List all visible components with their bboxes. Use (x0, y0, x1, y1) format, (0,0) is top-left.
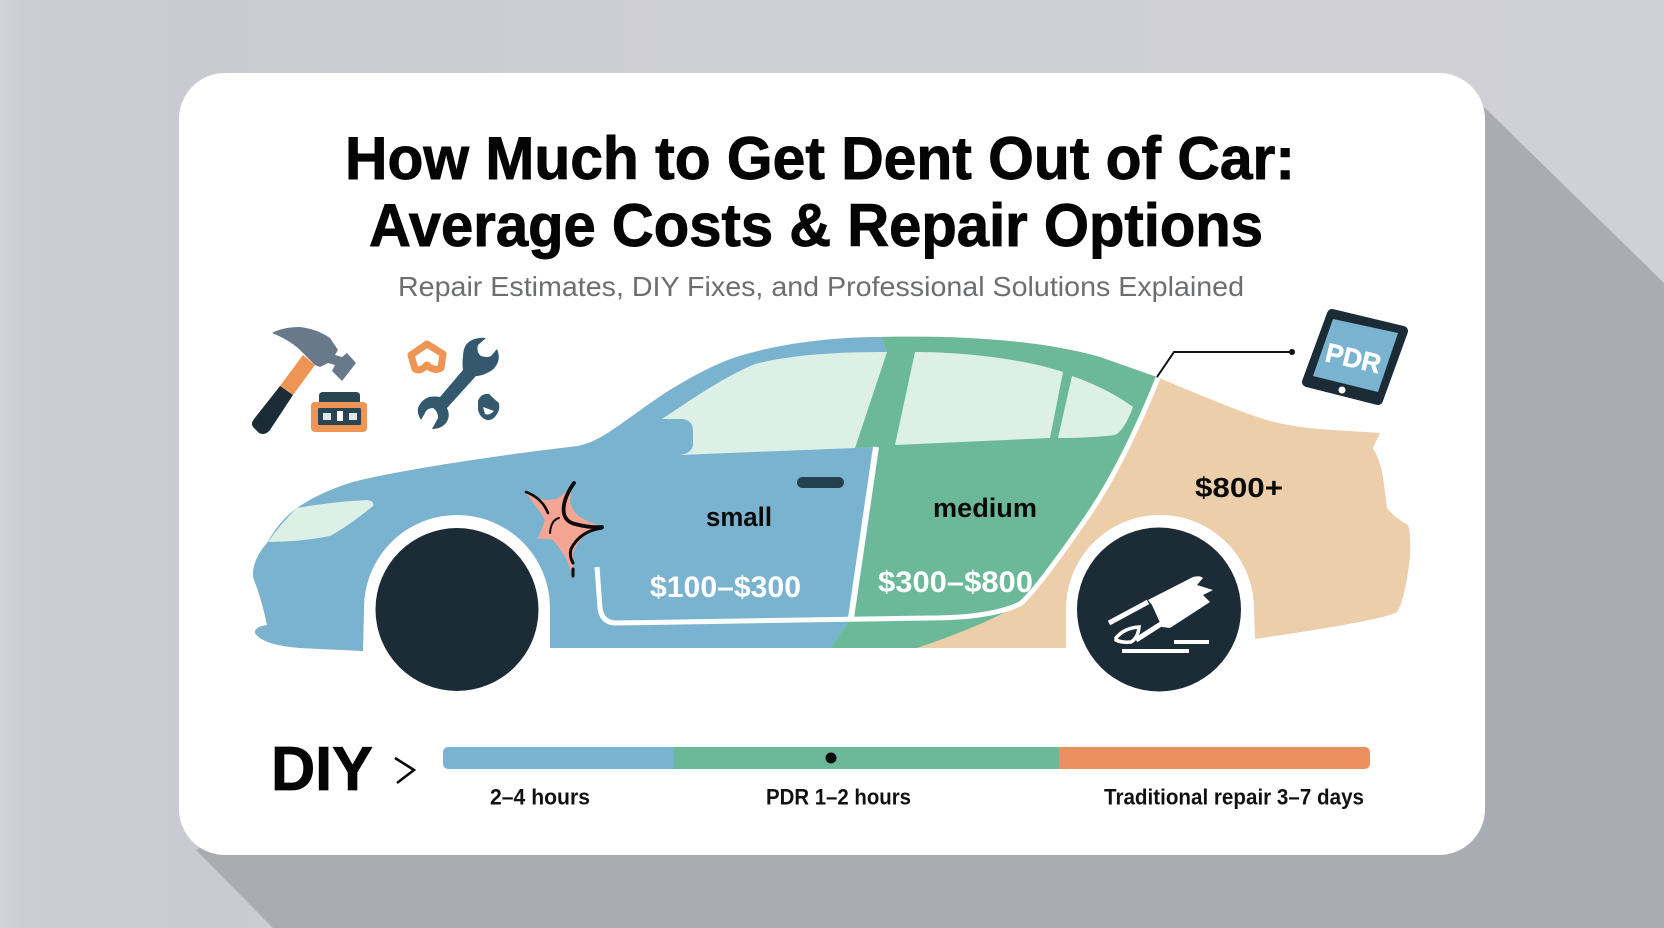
time label: traditional: Traditional repair 3–7 days (1104, 784, 1364, 810)
repair time bar (443, 747, 1370, 769)
small dent label: small (706, 502, 772, 532)
icon: dent mark (525, 482, 603, 577)
medium dent price: $300–$800 (878, 566, 1033, 599)
icon: PDR tablet: PDR (1323, 338, 1384, 379)
time label: DIY: 2–4 hours (490, 784, 590, 810)
medium dent label: medium (933, 493, 1037, 523)
large dent price: $800+ (1195, 472, 1283, 503)
side mirror (650, 419, 693, 458)
small dent price: $100–$300 (650, 571, 801, 604)
door seam lines (597, 378, 1158, 623)
title (345, 125, 1295, 259)
arrow (395, 758, 414, 783)
windows (662, 352, 1133, 455)
rear wheel with tool icon (1077, 528, 1241, 692)
icon: PDR tablet (1307, 314, 1403, 400)
callout line to PDR tablet (1157, 349, 1295, 377)
front wheel (376, 528, 538, 691)
card long shadow (196, 106, 1664, 928)
door handle (797, 477, 844, 488)
subtitle: Repair Estimates, DIY Fixes, and Professional Solutions Explained (398, 271, 1244, 302)
time label: PDR: PDR 1–2 hours (766, 784, 911, 810)
title: How Much to Get Dent Out of Car: (345, 125, 1295, 192)
icon: wrench and nut (411, 338, 499, 429)
headlight (268, 500, 373, 542)
car body: repair cost zones (240, 320, 1420, 660)
icon: hammer and toolbox (252, 327, 367, 434)
title: Average Costs & Repair Options (369, 192, 1263, 259)
white card panel (179, 73, 1485, 855)
DIY label: DIY (271, 735, 373, 804)
car illustration (240, 320, 1420, 692)
